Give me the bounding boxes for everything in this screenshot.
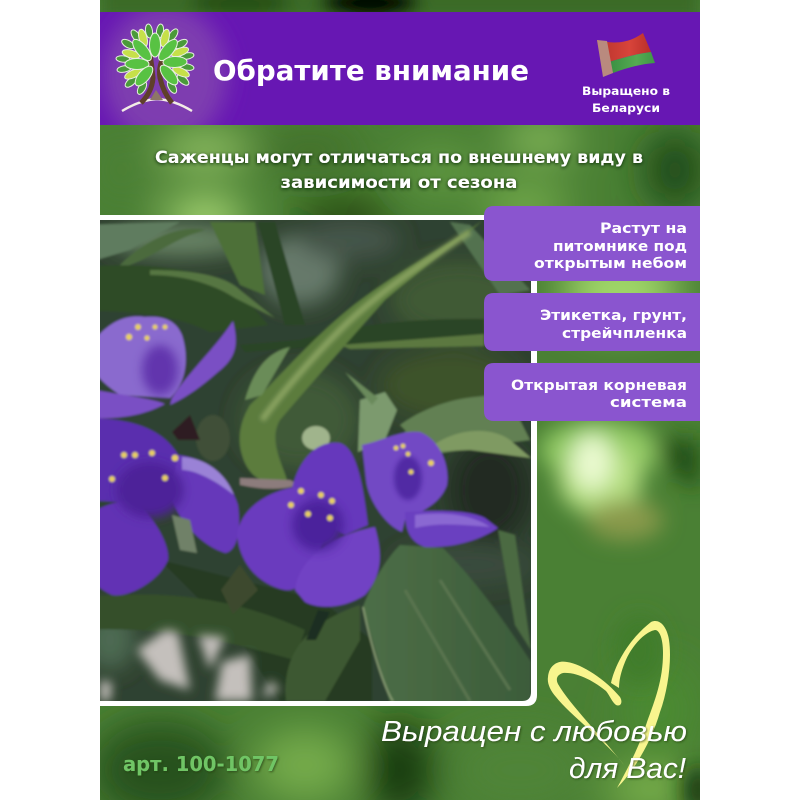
purple header band <box>100 12 700 125</box>
feature box: packaging: стрейчпленка <box>562 326 687 342</box>
feature box: open root system <box>484 363 700 421</box>
pale ground patches <box>100 630 280 701</box>
photo white frame <box>100 215 537 706</box>
feature box: outdoor nursery: питомнике под <box>553 239 687 255</box>
feature box: outdoor nursery: открытым небом <box>534 256 687 272</box>
flower: left <box>85 418 239 595</box>
feature box: packaging: Этикетка, грунт, <box>540 308 687 324</box>
tagline: grown with love: для Вас! <box>569 753 686 785</box>
central curved leaf <box>240 221 482 481</box>
tagline: grown with love <box>381 716 687 785</box>
photo background foliage <box>85 220 535 670</box>
made in Belarus label <box>583 86 670 114</box>
photo: purple spiderwort flowers <box>100 220 531 701</box>
icon: Belarus flag <box>597 33 655 77</box>
lower leaves <box>100 529 531 701</box>
buds and stems <box>172 415 330 489</box>
subheading text <box>155 148 643 193</box>
title: Обратите внимание <box>213 54 529 87</box>
feature box: outdoor nursery: Растут на <box>600 221 687 237</box>
feature box: open root system: система <box>610 395 687 411</box>
upper-left leaves <box>80 222 531 470</box>
icon: tree logo <box>116 24 194 111</box>
tagline: grown with love: Выращен с любовью <box>381 716 687 748</box>
flower: top left <box>85 316 236 418</box>
subheading text: Саженцы могут отличаться по внешнему виду в <box>155 148 643 168</box>
subheading text: зависимости от сезона <box>280 173 518 193</box>
flower: centre <box>237 443 380 607</box>
article number: арт. 100-1077 <box>123 752 279 776</box>
feature box: packaging <box>484 293 700 351</box>
green bokeh background <box>90 0 713 800</box>
feature box: outdoor nursery <box>484 206 700 281</box>
made in Belarus label: Выращено в <box>582 84 670 98</box>
made in Belarus label: Беларуси <box>592 101 660 115</box>
feature box: open root system: Открытая корневая <box>511 378 687 394</box>
flower: right <box>362 432 498 547</box>
icon: yellow heart <box>548 621 670 788</box>
